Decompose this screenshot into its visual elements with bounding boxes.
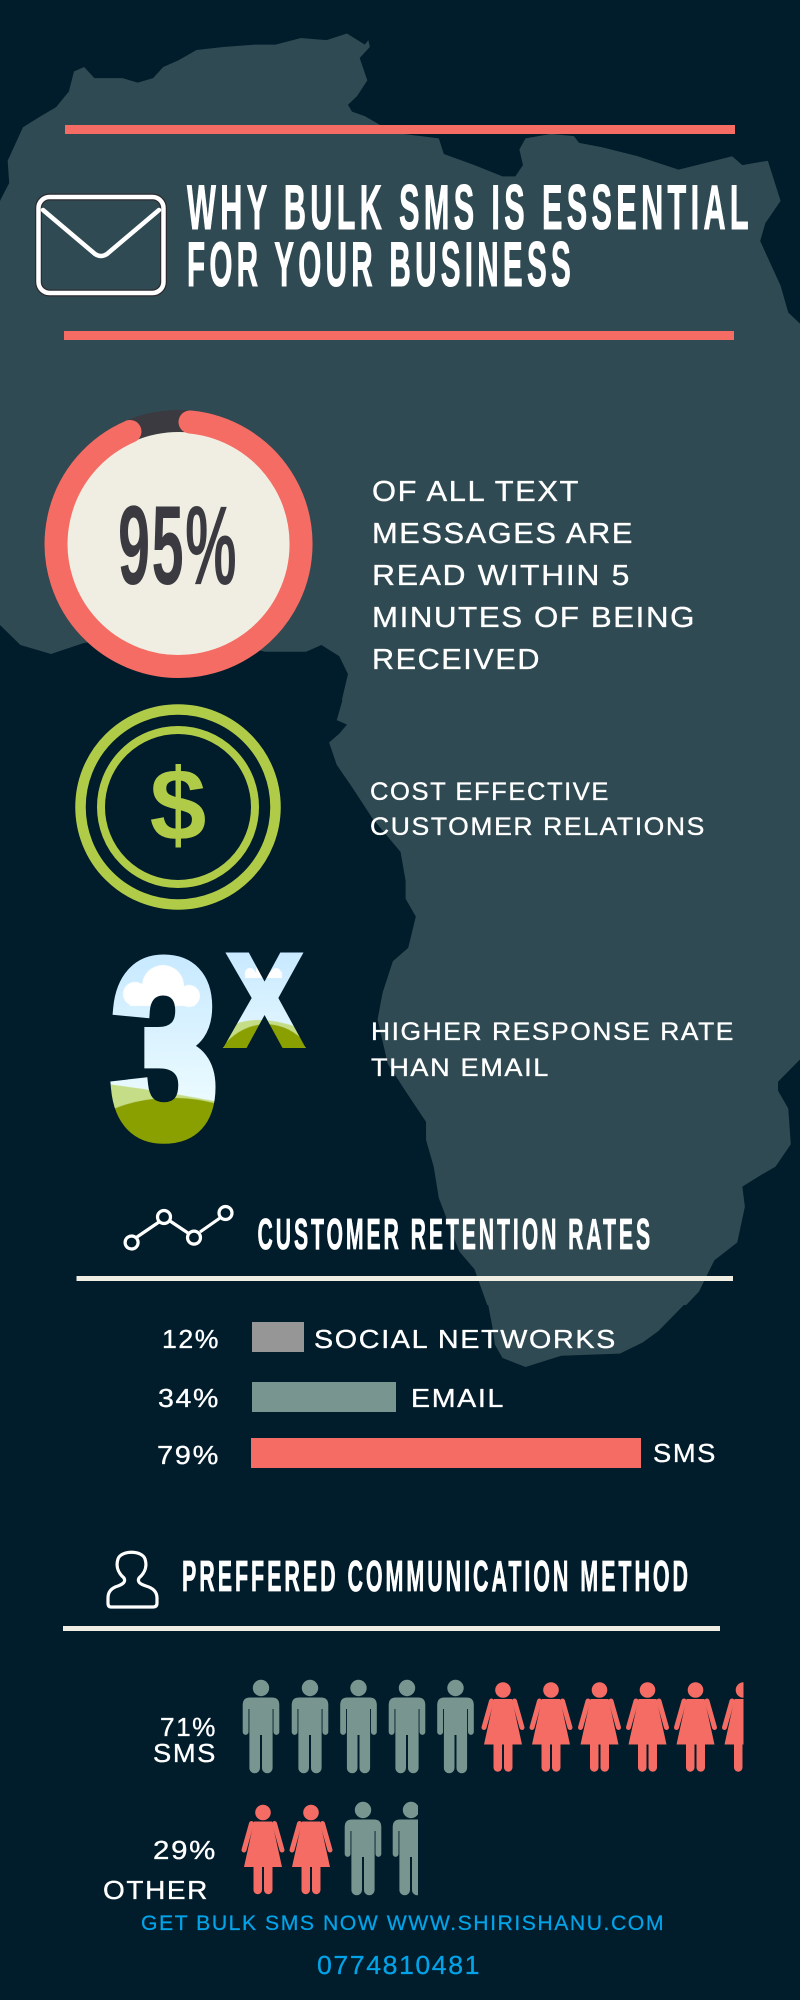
row: social networks: SOCIAL NETWORKS — [314, 1324, 617, 1354]
footer: phone number: 0774810481 — [317, 1950, 481, 1980]
row: sms — [157, 1438, 717, 1470]
text: cost effective: COST EFFECTIVE — [370, 778, 610, 806]
label: 71% sms — [153, 1712, 217, 1768]
icon: person outline — [108, 1552, 157, 1607]
text: cost effective: CUSTOMER RELATIONS — [370, 813, 706, 841]
rule: retention — [76, 1276, 733, 1281]
row: email: EMAIL — [411, 1383, 505, 1413]
map of Africa — [0, 33, 800, 1367]
label: 71% sms: 71% — [160, 1712, 217, 1742]
donut chart: 95%: 95% — [118, 483, 238, 608]
text: higher response rate — [371, 1018, 735, 1082]
label: 71% sms: SMS — [153, 1738, 217, 1768]
text: 95% description: READ WITHIN 5 — [372, 560, 631, 592]
bar chart: retention rates — [157, 1322, 717, 1470]
pictogram row: other — [244, 1802, 429, 1895]
header rule bottom — [64, 331, 734, 340]
text: 95% description: OF ALL TEXT — [372, 476, 580, 508]
label: 29% other: OTHER — [103, 1875, 209, 1905]
text: 95% description: RECEIVED — [372, 644, 541, 676]
label: 29% other: 29% — [153, 1835, 217, 1865]
row: email: 34% — [158, 1383, 220, 1413]
pictogram row: sms — [243, 1680, 762, 1773]
label: 29% other — [103, 1835, 217, 1905]
text: 95% description — [372, 476, 696, 676]
icon: line chart — [125, 1206, 232, 1249]
row: sms: SMS — [653, 1438, 717, 1468]
row: sms: 79% — [157, 1440, 220, 1470]
row: social networks — [162, 1322, 617, 1354]
icon: envelope — [38, 197, 164, 293]
header rule top — [65, 125, 735, 134]
title — [187, 173, 753, 300]
text: cost effective — [370, 778, 706, 841]
text: 95% description: MINUTES OF BEING — [372, 602, 696, 634]
text: higher response rate: HIGHER RESPONSE RATE — [371, 1018, 735, 1046]
graphic: 3x with landscape fill: X — [227, 927, 302, 1073]
row: social networks: 12% — [162, 1324, 220, 1354]
footer: call to action: GET BULK SMS NOW WWW.SHIRISHANU.COM — [141, 1912, 665, 1935]
donut chart: 95% — [56, 422, 301, 666]
icon: dollar coin: $ — [150, 748, 206, 862]
text: higher response rate: THAN EMAIL — [371, 1054, 550, 1082]
row: email — [158, 1382, 505, 1413]
text: 95% description: MESSAGES ARE — [372, 518, 634, 550]
icon: dollar coin — [80, 710, 276, 904]
rule: communication — [63, 1626, 720, 1631]
graphic: 3x with landscape fill: 3 — [112, 911, 217, 1187]
